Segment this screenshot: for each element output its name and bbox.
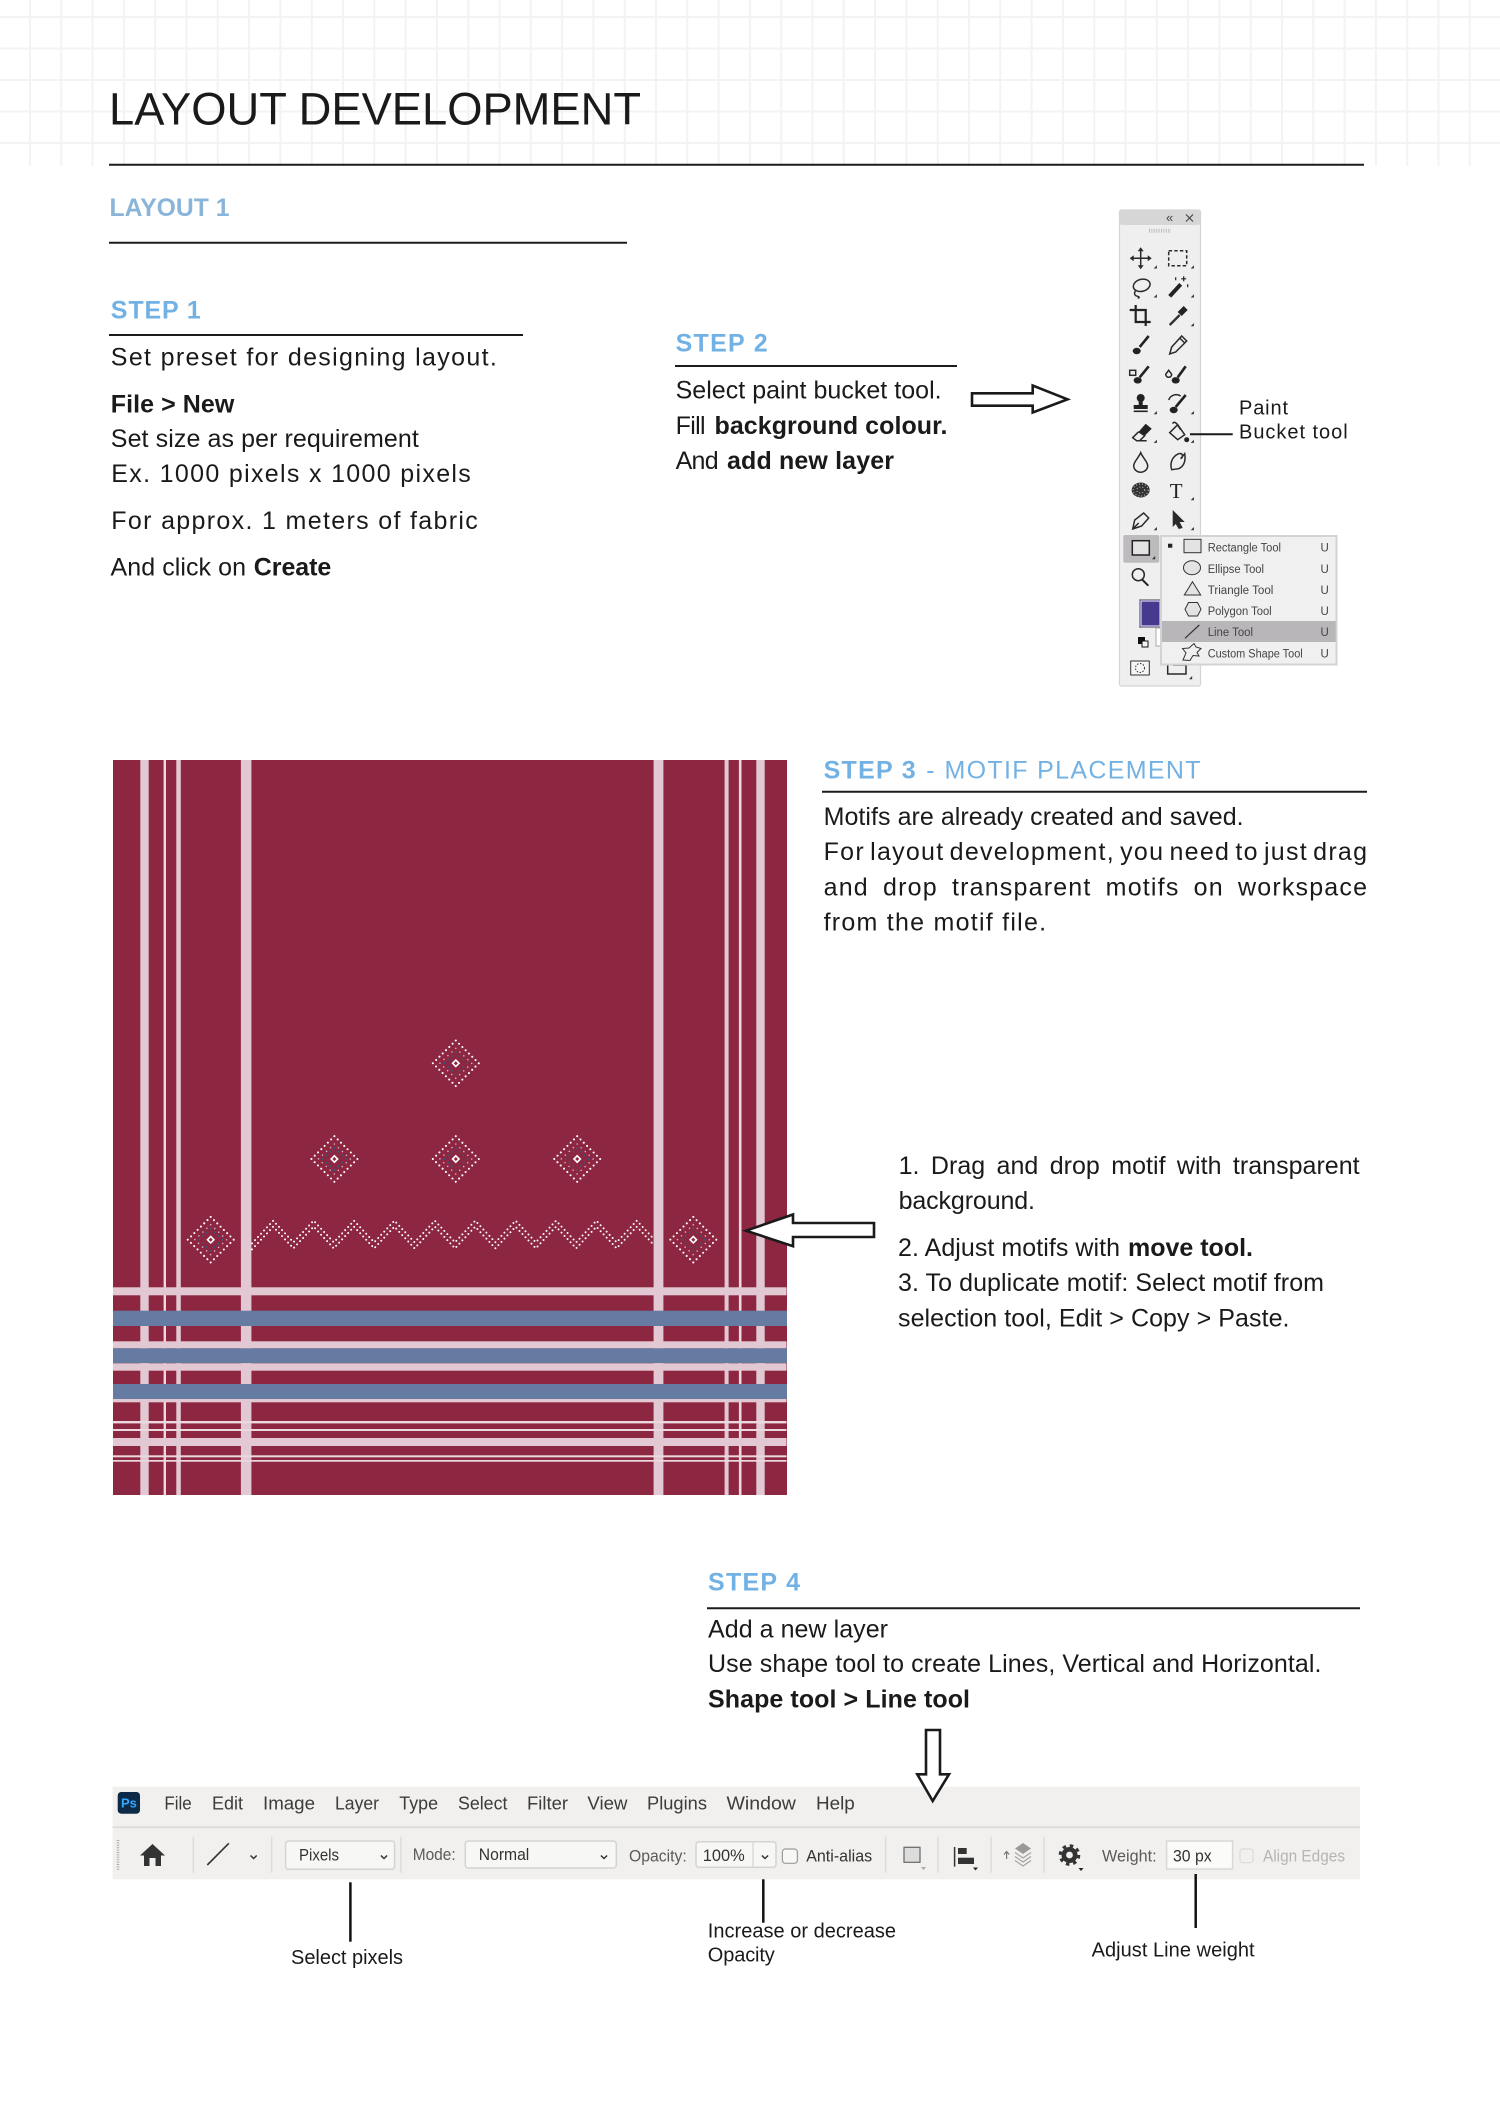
- flyout row: polygon tool: U: [1320, 606, 1329, 618]
- field: opacity 100%: [696, 1842, 776, 1867]
- text: step 2 instructions: And: [676, 447, 719, 475]
- panel: step 4: [707, 1569, 1360, 1713]
- text: step 3 numbered list: 2. Adjust motifs with: [898, 1234, 1120, 1262]
- text: step 3 numbered list: background.: [899, 1187, 1035, 1215]
- motif: right border diamond: [670, 1217, 716, 1262]
- label: weight: Weight:: [1102, 1848, 1157, 1866]
- title: LAYOUT DEVELOPMENT: [109, 84, 641, 134]
- heading: step 3 motif placement: [824, 756, 1200, 784]
- icon: quick mask: [1131, 661, 1149, 675]
- icon: history brush tool: [1169, 395, 1194, 414]
- icon: align: [955, 1847, 978, 1870]
- text: step 2 instructions: Fill: [676, 412, 706, 440]
- label: mode: Mode:: [413, 1846, 456, 1864]
- icon: photoshop logo: [118, 1792, 140, 1814]
- callout: paint bucket tool: Paint: [1239, 397, 1288, 419]
- icon: pencil tool: [1170, 336, 1187, 354]
- menu bar: [164, 1793, 855, 1813]
- text: step 3 description: from the motif file.: [824, 908, 1046, 936]
- callout: opacity: Opacity: [708, 1945, 775, 1967]
- flyout row: rectangle tool: [1184, 539, 1329, 554]
- heading: step 4: STEP 4: [708, 1569, 800, 1597]
- flyout row: custom shape tool: Custom Shape Tool: [1208, 648, 1303, 660]
- panel: step 2: [675, 330, 957, 475]
- menu bar: Plugins: [647, 1793, 707, 1813]
- heading: step 1: STEP 1: [111, 296, 201, 324]
- panel: photoshop toolbox: «: [1166, 210, 1173, 225]
- text: step 3 numbered list: 1. Drag and drop motif with transparent: [899, 1152, 1360, 1180]
- menu bar: Edit: [212, 1793, 243, 1813]
- text: step 4 instructions: Shape tool > Line tool: [708, 1685, 970, 1713]
- motif: middle left diamond: [311, 1136, 357, 1182]
- flyout row: custom shape tool: [1182, 644, 1329, 660]
- callout: paint bucket tool: Bucket tool: [1239, 421, 1348, 443]
- text: step 3 numbered list: selection tool, Edit > Copy > Paste.: [898, 1304, 1290, 1332]
- icon: eyedropper tool: [1170, 306, 1194, 326]
- menu bar: Layer: [335, 1793, 379, 1813]
- motif: middle centre diamond: [433, 1136, 479, 1182]
- label: opacity: Opacity:: [629, 1848, 687, 1866]
- text: step 3 description: and drop transparent motifs on workspace: [824, 874, 1367, 902]
- motif: top diamond: [433, 1040, 479, 1086]
- flyout row: ellipse tool: Ellipse Tool: [1208, 564, 1264, 576]
- text: step 3 numbered list: move tool.: [1128, 1234, 1253, 1262]
- flyout row: polygon tool: [1185, 602, 1329, 618]
- menu bar: Window: [726, 1793, 797, 1813]
- icon: layer arrange: [1004, 1843, 1031, 1866]
- icon: magic wand tool: [1170, 276, 1194, 298]
- icon: stamp tool: [1134, 394, 1157, 414]
- dropdown: pixels: Pixels: [299, 1847, 339, 1865]
- panel: step 3: [822, 756, 1367, 1332]
- flyout row: rectangle tool: Rectangle Tool: [1208, 542, 1281, 554]
- text: step 1 instructions: [110, 344, 497, 582]
- icon: screen mode: [1168, 665, 1192, 679]
- panel: photoshop toolbox: [1120, 210, 1200, 686]
- panel: photoshop options bar: [113, 1787, 1360, 1879]
- menu bar: Help: [816, 1793, 855, 1813]
- text: step 3 description: For layout development, you need to just drag: [824, 838, 1367, 866]
- field: weight 30 px: [1167, 1841, 1233, 1869]
- menu bar: Image: [263, 1793, 315, 1813]
- text: step 3 numbered list: [898, 1152, 1360, 1332]
- text: step 2 instructions: background colour.: [714, 412, 948, 440]
- field: opacity 100%: 100%: [703, 1847, 745, 1865]
- icon: type tool: T: [1170, 479, 1183, 503]
- panel: shape tool flyout: [1161, 536, 1336, 664]
- flyout row: custom shape tool: U: [1320, 648, 1329, 660]
- heading: step 3 motif placement: MOTIF PLACEMENT: [944, 756, 1200, 784]
- icon: settings gear: [1060, 1846, 1084, 1871]
- icon: lasso tool: [1132, 277, 1157, 298]
- dropdown: pixels: [286, 1841, 395, 1869]
- dropdown: normal: Normal: [479, 1846, 529, 1864]
- callout: select pixels: [291, 1882, 403, 1969]
- arrow: step 2 to toolbox: [972, 386, 1068, 412]
- fabric layout artwork: [113, 760, 787, 1495]
- text: step 2 instructions: add new layer: [727, 447, 894, 475]
- motif: zigzag border: [252, 1221, 652, 1249]
- text: step 1 instructions: Ex. 1000 pixels x 1000 pixels: [111, 460, 471, 488]
- panel: step 1: [109, 296, 523, 582]
- flyout row: ellipse tool: [1184, 561, 1329, 576]
- heading: step 3 motif placement: -: [926, 756, 935, 784]
- icon: smudge tool: [1171, 454, 1185, 470]
- icon: shape tool selected: [1123, 535, 1159, 563]
- text: step 1 instructions: Set size as per requirement: [111, 425, 419, 453]
- icon: line tool: [207, 1843, 229, 1865]
- icon: mixer brush tool: [1166, 366, 1186, 384]
- menu bar: View: [587, 1793, 628, 1813]
- text: step 1 instructions: And click on: [110, 554, 246, 582]
- horizontal stripes: [113, 1287, 786, 1462]
- icon: path mode swatch: [904, 1847, 926, 1870]
- icon: blur tool: [1134, 453, 1148, 472]
- heading: layout 1: LAYOUT 1: [110, 194, 230, 222]
- text: step 3 numbered list: 3. To duplicate motif: Select motif from: [898, 1269, 1324, 1297]
- icon: photoshop logo: Ps: [121, 1796, 137, 1810]
- icon: path selection tool: [1173, 510, 1194, 530]
- flyout row: rectangle tool: U: [1320, 542, 1329, 554]
- dropdown: normal: [465, 1841, 616, 1868]
- callout: opacity: [708, 1879, 896, 1967]
- icon: foreground colour swatch: [1138, 600, 1162, 647]
- icon: sponge tool: [1132, 482, 1150, 498]
- menu bar: Filter: [527, 1793, 568, 1813]
- text: step 4 instructions: [708, 1615, 1322, 1713]
- arrow: list to fabric: [746, 1214, 874, 1246]
- icon: home: [140, 1844, 165, 1866]
- text: step 4 instructions: Use shape tool to create Lines, Vertical and Horizontal.: [708, 1650, 1322, 1678]
- heading: step 3 motif placement: STEP 3: [824, 756, 916, 784]
- menu bar: Type: [399, 1793, 438, 1813]
- icon: type tool: [1170, 479, 1194, 503]
- flyout row: triangle tool: [1184, 582, 1329, 597]
- text: step 2 instructions: Select paint bucket tool.: [676, 376, 942, 404]
- icon: move tool: [1130, 247, 1157, 269]
- text: step 3 description: Motifs are already created and saved.: [824, 803, 1244, 831]
- arrow: step 4 to options bar: [917, 1730, 949, 1801]
- icon: paint bucket tool: [1170, 422, 1194, 443]
- flyout row: polygon tool: Polygon Tool: [1208, 606, 1272, 618]
- icon: eraser tool: [1133, 424, 1157, 443]
- text: step 4 instructions: Add a new layer: [708, 1615, 888, 1643]
- callout: paint bucket tool: [1190, 397, 1348, 443]
- icon: crop tool: [1130, 305, 1151, 326]
- icon: zoom tool: [1132, 569, 1148, 586]
- flyout row: line tool: [1185, 625, 1329, 639]
- text: step 1 instructions: File > New: [111, 390, 235, 418]
- text: step 3 description: [824, 803, 1367, 936]
- menu bar: Select: [458, 1793, 507, 1813]
- flyout row: triangle tool: Triangle Tool: [1208, 585, 1273, 597]
- field: weight 30 px: 30 px: [1173, 1848, 1212, 1866]
- icon: pen tool: [1133, 513, 1157, 530]
- motif: middle right diamond: [554, 1136, 600, 1182]
- icon: colour replacement tool: [1130, 366, 1149, 384]
- text: step 1 instructions: Set preset for designing layout.: [111, 344, 497, 372]
- vertical stripes: [140, 760, 765, 1495]
- flyout row: ellipse tool: U: [1320, 564, 1329, 576]
- motif: left border diamond: [188, 1217, 234, 1262]
- callout: opacity: Increase or decrease: [708, 1921, 896, 1943]
- text: step 1 instructions: Create: [254, 554, 331, 582]
- text: step 1 instructions: For approx. 1 meters of fabric: [111, 507, 478, 535]
- heading: step 2: STEP 2: [676, 330, 768, 358]
- callout: line weight: Adjust Line weight: [1092, 1940, 1255, 1962]
- checkbox: anti-alias: Anti-alias: [806, 1848, 872, 1866]
- icon: brush tool: [1133, 336, 1149, 354]
- flyout row: line tool: U: [1320, 627, 1329, 639]
- icon: marquee tool: [1169, 251, 1194, 268]
- callout: select pixels: Select pixels: [291, 1947, 403, 1969]
- menu bar: File: [164, 1793, 192, 1813]
- blue bands: [113, 1311, 787, 1399]
- flyout row: triangle tool: U: [1320, 585, 1329, 597]
- text: step 2 instructions: [676, 376, 948, 475]
- checkbox: align edges: Align Edges: [1263, 1848, 1345, 1866]
- flyout row: line tool: Line Tool: [1208, 627, 1253, 639]
